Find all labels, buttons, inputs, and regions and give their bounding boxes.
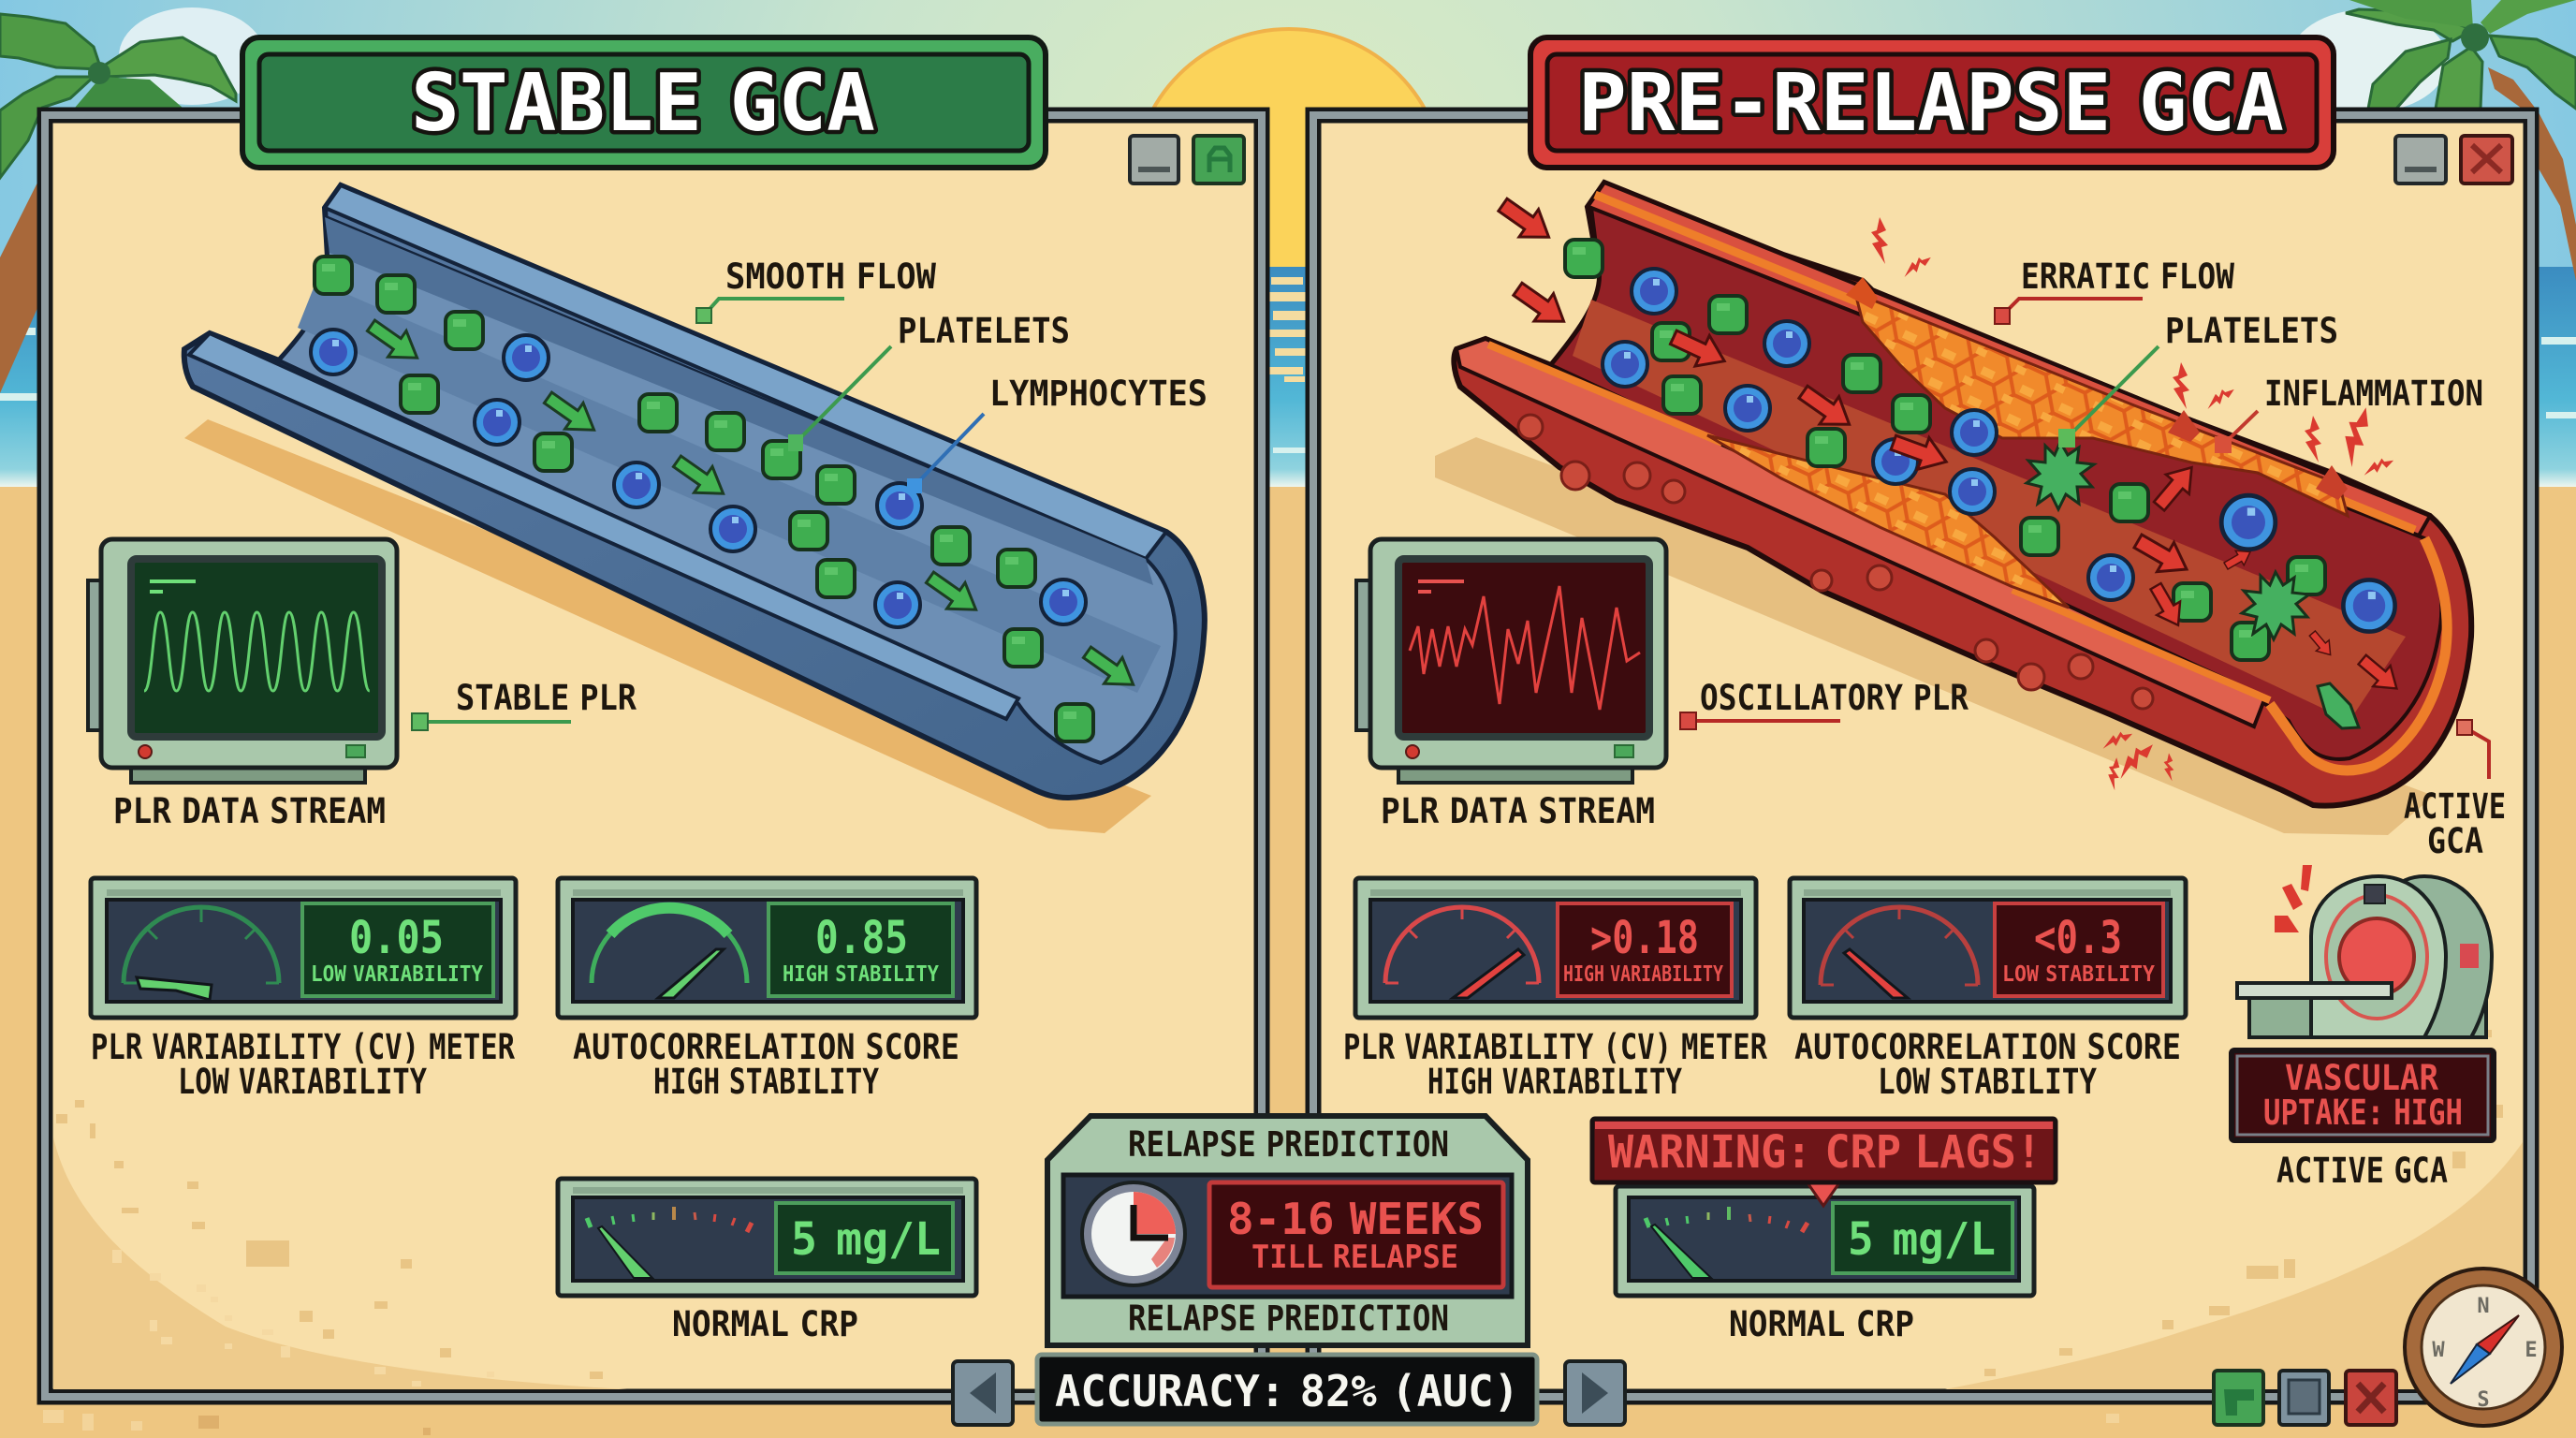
meter: PLR variability low: 0.05	[349, 912, 444, 964]
vessel tube	[184, 185, 1205, 798]
icon: compass: W	[2432, 1339, 2445, 1362]
label: autocorrelation low: AUTOCORRELATION SCORE	[1794, 1027, 2181, 1067]
label: normal CRP pre-relapse: NORMAL CRP	[1729, 1304, 1914, 1344]
lymphocytes	[1603, 269, 2395, 632]
icon: clock	[1082, 1182, 1185, 1285]
icon: compass: E	[2525, 1339, 2538, 1362]
meter: normal CRP pre-relapse: 5 mg/L	[1848, 1213, 1996, 1266]
meter: autocorrelation high: 0.85	[815, 912, 908, 964]
callout: platelets	[2058, 311, 2338, 448]
plaque: upper wall	[1855, 293, 2348, 516]
callout: oscillatory PLR: OSCILLATORY PLR	[1700, 678, 1969, 718]
activated platelets	[2027, 442, 2359, 728]
callout: platelets: PLATELETS	[2165, 311, 2338, 351]
panel: pre-relapse GCA	[1313, 37, 2531, 1397]
readout: weeks till relapse: TILL RELAPSE	[1251, 1239, 1458, 1276]
meter: autocorrelation low	[1790, 878, 2186, 1018]
erratic flow arrows	[1493, 191, 2406, 698]
monitor: stable PLR	[88, 539, 397, 783]
header: PRE-RELAPSE GCA: PRE-RELAPSE GCA	[1578, 57, 2284, 150]
label: autocorrelation high: AUTOCORRELATION SCORE	[573, 1027, 959, 1067]
icon: MRI scanner	[2237, 865, 2492, 1037]
meter: PLR variability high: HIGH VARIABILITY	[1563, 962, 1723, 987]
callout: smooth flow: SMOOTH FLOW	[725, 257, 937, 297]
plaque: lower wall	[1707, 435, 2069, 608]
callout: inflammation: INFLAMMATION	[2264, 374, 2483, 414]
callout: active GCA	[2404, 720, 2506, 861]
label: autocorrelation high: HIGH STABILITY	[653, 1062, 880, 1102]
callout: stable PLR: STABLE PLR	[456, 678, 637, 718]
label: PLR variability high: HIGH VARIABILITY	[1427, 1062, 1683, 1102]
callout: platelets: PLATELETS	[898, 311, 1070, 351]
label: PLR variability high: PLR VARIABILITY (CV) METER	[1343, 1027, 1768, 1067]
platelets	[315, 257, 1093, 741]
inflamed vessel tube	[1454, 183, 2471, 806]
panel frame stable	[45, 115, 1262, 1397]
header: STABLE GCA	[242, 37, 1046, 168]
flow arrows	[362, 313, 1142, 697]
icon: compass: N	[2477, 1295, 2490, 1318]
callout: platelets	[788, 311, 1070, 451]
callout: stable PLR	[412, 678, 637, 730]
callout: lymphocytes: LYMPHOCYTES	[989, 374, 1208, 414]
label: PLR data stream: PLR DATA STREAM	[113, 791, 386, 831]
label: PLR variability high	[1343, 1027, 1768, 1102]
label: normal CRP stable: NORMAL CRP	[672, 1304, 858, 1344]
icon: compass: S	[2477, 1388, 2490, 1412]
label: relapse prediction top: RELAPSE PREDICTION	[1128, 1124, 1449, 1165]
header: PRE-RELAPSE GCA	[1530, 37, 2334, 168]
readout: vascular uptake high	[2232, 1050, 2494, 1140]
meter: autocorrelation low: LOW STABILITY	[2002, 962, 2155, 987]
label: PLR variability low	[91, 1027, 516, 1102]
meter: normal CRP stable: 5 mg/L	[791, 1213, 941, 1266]
display background	[1063, 1175, 1512, 1297]
meter: PLR variability low	[91, 878, 516, 1018]
artery illustration stable	[184, 185, 1205, 833]
monitor: oscillatory PLR	[1356, 539, 1666, 783]
label: relapse prediction bottom: RELAPSE PREDICTION	[1128, 1299, 1449, 1339]
header: STABLE GCA: STABLE GCA	[411, 57, 875, 150]
label: autocorrelation low	[1794, 1027, 2181, 1102]
meter: autocorrelation low: <0.3	[2034, 912, 2122, 964]
label: autocorrelation low: LOW STABILITY	[1878, 1062, 2098, 1102]
palm tree left	[0, 14, 236, 393]
window buttons stable	[1130, 136, 1244, 183]
readout: vascular uptake high: UPTAKE: HIGH	[2263, 1093, 2463, 1133]
sand speckles left panel	[56, 1100, 603, 1379]
platelets	[1565, 240, 2325, 660]
arrow button right	[1565, 1361, 1625, 1425]
label: autocorrelation high	[573, 1027, 959, 1102]
callout: active GCA: ACTIVE	[2404, 786, 2506, 827]
sand speckles right panel	[1984, 1030, 2503, 1376]
panel: relapse prediction	[1047, 1116, 1528, 1345]
meter: PLR variability high: >0.18	[1590, 912, 1699, 964]
callout: lymphocytes	[907, 374, 1208, 493]
pale speckles left panel	[112, 1250, 494, 1387]
label: PLR variability low: PLR VARIABILITY (CV) METER	[91, 1027, 516, 1067]
callout: active GCA: GCA	[2427, 821, 2483, 861]
callout: smooth flow	[696, 257, 937, 323]
meter: autocorrelation high: HIGH STABILITY	[783, 962, 939, 987]
icon: compass	[2405, 1269, 2562, 1426]
callout: oscillatory PLR	[1680, 678, 1969, 729]
label: PLR data stream: PLR DATA STREAM	[1381, 791, 1655, 831]
arrow button left	[953, 1361, 1013, 1425]
inflammation sparks	[1846, 217, 2395, 791]
label: active GCA: ACTIVE GCA	[2276, 1151, 2448, 1191]
readout: vascular uptake high: VASCULAR	[2285, 1058, 2439, 1098]
accuracy display	[1037, 1355, 1537, 1424]
meter: normal CRP pre-relapse	[1616, 1186, 2034, 1296]
vessel shadow	[1435, 437, 2434, 835]
warning: CRP lags	[1592, 1119, 2056, 1206]
accuracy display: ACCURACY: 82% (AUC)	[1055, 1366, 1519, 1416]
window buttons bottom	[2214, 1371, 2396, 1425]
lymphocytes	[311, 330, 1086, 627]
meter: autocorrelation high	[558, 878, 976, 1018]
panel: stable GCA	[45, 37, 1262, 1397]
readout: weeks till relapse: 8-16 WEEKS	[1227, 1194, 1484, 1244]
meter: PLR variability low: LOW VARIABILITY	[311, 962, 483, 987]
meter: PLR variability high	[1355, 878, 1756, 1018]
warning: CRP lags: WARNING: CRP LAGS!	[1608, 1126, 2042, 1179]
accuracy bar	[953, 1355, 1625, 1425]
palm tree right	[2346, 0, 2576, 281]
callout: inflammation	[2215, 374, 2483, 453]
window buttons pre-relapse	[2395, 136, 2512, 183]
label: PLR variability low: LOW VARIABILITY	[178, 1062, 428, 1102]
meter: normal CRP stable	[558, 1179, 976, 1296]
panel frame pre-relapse	[1313, 115, 2531, 1397]
vessel shadow	[184, 419, 1151, 833]
callout: erratic flow: ERRATIC FLOW	[2021, 257, 2235, 297]
artery illustration pre-relapse	[1435, 183, 2471, 835]
readout: weeks till relapse	[1209, 1182, 1503, 1287]
callout: erratic flow	[1995, 257, 2235, 324]
